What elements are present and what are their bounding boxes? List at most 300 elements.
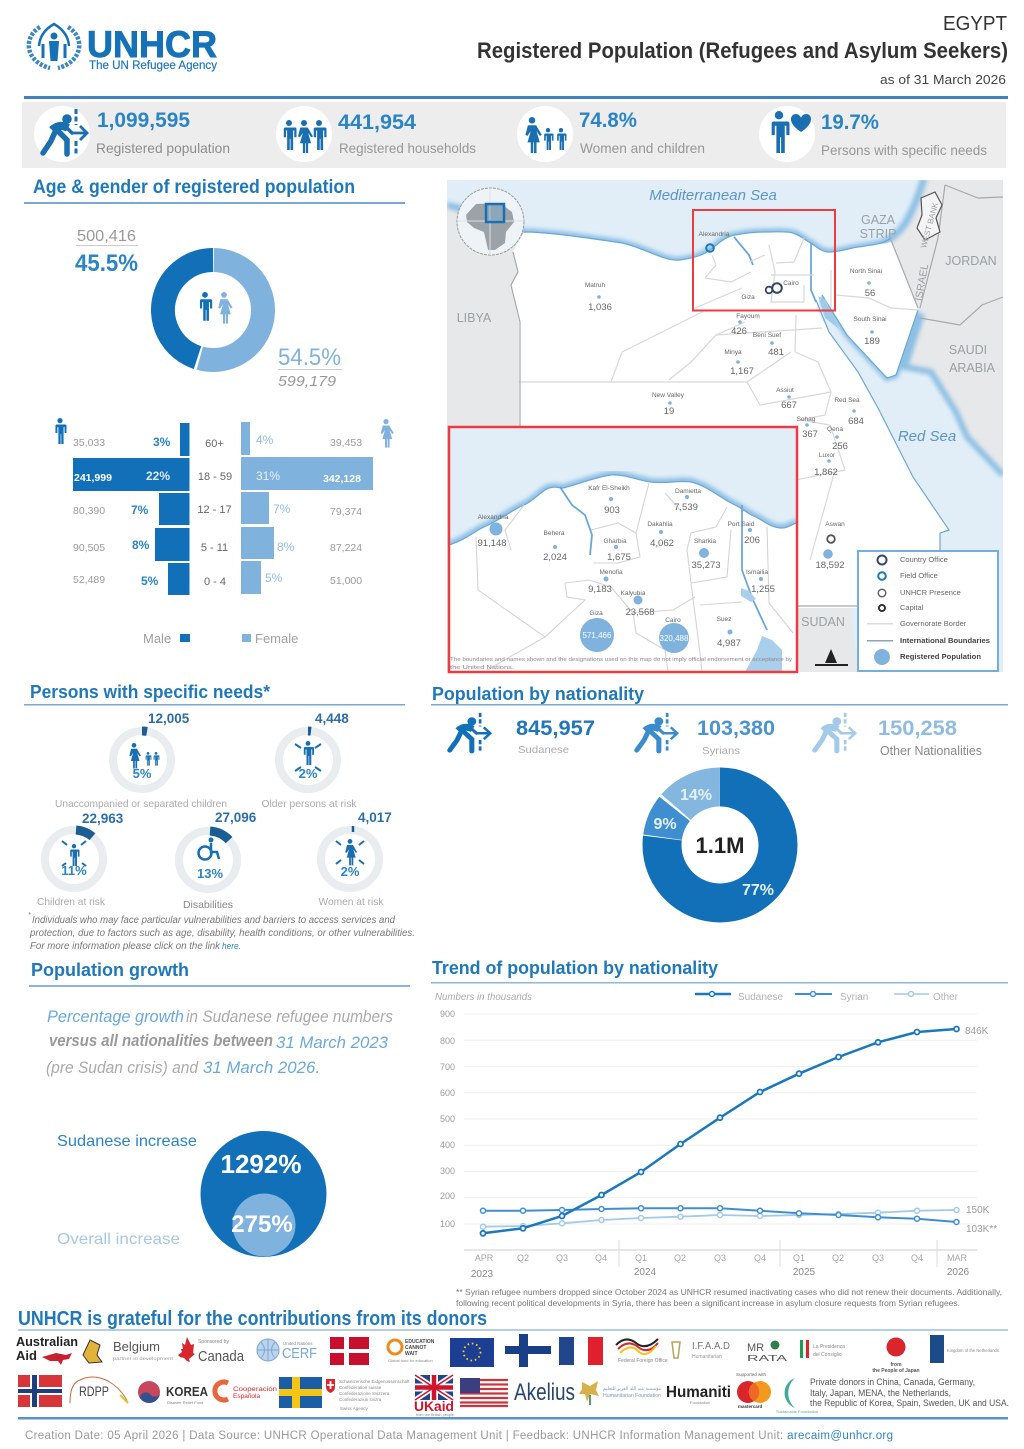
ring: older persons: 4,448 bbox=[315, 711, 349, 726]
donor: foundation text: Humanitarian Foundation bbox=[603, 1393, 661, 1399]
text: private donors: Italy, Japan, MENA, the Netherlands, bbox=[810, 1388, 951, 1398]
chart: population pyramid: 60+ bbox=[205, 438, 224, 450]
governorate labels: 18,592 bbox=[815, 560, 845, 571]
chart: population pyramid: 8% bbox=[132, 538, 150, 552]
donor: UK aid bbox=[414, 1375, 454, 1417]
donor: Netherlands bbox=[930, 1335, 1000, 1363]
line chart: trend: 300 bbox=[440, 1166, 455, 1176]
inset map: Nile Delta: The boundaries and names shown and the designations used on this map do not imply official endorsement or acceptance by bbox=[450, 657, 792, 663]
donor: IFAD bbox=[692, 1341, 730, 1360]
title: as of 31 March 2026 bbox=[880, 72, 1006, 87]
icon: refugee walking bbox=[43, 109, 87, 156]
governorate labels: Matruh bbox=[585, 282, 605, 289]
donor: Education Cannot Wait: WAIT bbox=[405, 1351, 418, 1357]
label: male share: 45.5% bbox=[75, 250, 138, 277]
donor: Mastercard Foundation: mastercard bbox=[738, 1404, 763, 1409]
donor: tree emblem bbox=[579, 1381, 599, 1405]
sea: Mediterranean bbox=[447, 178, 1003, 672]
chart: population pyramid: 8% bbox=[277, 540, 295, 554]
donor: Belgium bbox=[113, 1339, 174, 1361]
ring: unaccompanied children bbox=[55, 711, 227, 810]
inset map: Nile Delta: 1,675 bbox=[607, 552, 631, 563]
icon: Sudanese bbox=[450, 713, 490, 753]
series: Syrian bbox=[480, 1206, 959, 1224]
governorate labels: Giza bbox=[741, 294, 755, 301]
donor: Switzerland: Confederaziun svizra bbox=[339, 1397, 382, 1402]
inset map: Nile Delta: Sharkia bbox=[694, 538, 716, 545]
donor: crescent: Sustainable Foundation bbox=[776, 1409, 818, 1414]
footnote: specific needs: For more information please click on the link bbox=[30, 941, 221, 952]
line chart: trend: Q4 bbox=[595, 1253, 607, 1263]
chart: population pyramid: 90,505 bbox=[73, 542, 105, 554]
figure: Syrians bbox=[697, 717, 775, 757]
key figure: registered population: 1,099,595 bbox=[97, 109, 190, 132]
logo: UNHCR: UNHCR bbox=[87, 24, 217, 65]
ring: older persons: 2% bbox=[299, 766, 318, 781]
inset map: Nile Delta: Damietta bbox=[675, 488, 701, 495]
donor: Ireland harp bbox=[672, 1342, 680, 1358]
labels: countries and seas: JORDAN bbox=[945, 254, 997, 268]
inset map: Nile Delta: 4,987 bbox=[717, 638, 741, 649]
red extent box bbox=[693, 210, 835, 310]
inset map: Nile Delta: Cairo bbox=[665, 617, 681, 624]
donut chart: nationality bbox=[638, 763, 802, 927]
text: private donors: Private donors in China, Canada, Germany, bbox=[810, 1377, 975, 1387]
icon: Syrians bbox=[637, 713, 677, 753]
donor: IOM: RATA bbox=[747, 1354, 788, 1363]
donor: Education Cannot Wait: EDUCATION bbox=[405, 1339, 435, 1345]
chart: growth circles: Sudanese increase bbox=[57, 1133, 197, 1150]
bubbles bbox=[490, 495, 763, 653]
map legend: International Boundaries bbox=[900, 636, 990, 645]
donor: Australian Aid bbox=[16, 1334, 78, 1365]
figure: other bbox=[878, 717, 982, 758]
map legend: Field Office bbox=[900, 571, 938, 580]
chart legend bbox=[695, 992, 959, 1003]
inset map: Nile Delta: Ismailia bbox=[746, 569, 768, 576]
governorate labels: 189 bbox=[864, 336, 880, 347]
key figure: households bbox=[338, 111, 476, 156]
title: EGYPT bbox=[943, 13, 1007, 35]
donor: Switzerland: Confederazione Svizzera bbox=[339, 1391, 390, 1396]
labels: countries and seas: Mediterranean Sea bbox=[649, 187, 777, 204]
line chart: trend: 600 bbox=[440, 1088, 455, 1098]
flag: Sweden bbox=[279, 1377, 322, 1408]
key figure: registered population: Registered population bbox=[96, 140, 230, 156]
footnote: specific needs: here. bbox=[222, 941, 241, 951]
panel: key figures bbox=[22, 102, 1006, 168]
line chart: trend: 700 bbox=[440, 1062, 455, 1072]
chart: population pyramid: 5% bbox=[265, 571, 283, 585]
label: male share: 500,416 bbox=[77, 228, 136, 245]
footnote: Syrian numbers: following recent political developments in Syria, there has been a significant increase in asylum closure requests from Syrian refugees. bbox=[456, 1298, 960, 1308]
donor: Italy: del Consiglio bbox=[813, 1352, 842, 1358]
ring: older persons bbox=[262, 711, 357, 810]
icon: person with heart bbox=[771, 111, 811, 153]
key figure: registered population bbox=[96, 109, 230, 156]
donut chart: nationality: 1.1M bbox=[696, 833, 744, 858]
inset map: Nile Delta: 23,568 bbox=[625, 607, 655, 618]
line chart: trend: Q2 bbox=[674, 1253, 686, 1263]
donor: Korea: KOREA bbox=[166, 1384, 209, 1399]
labels: countries and seas: SUDAN bbox=[801, 615, 845, 629]
labels: countries and seas: ISRAEL bbox=[913, 263, 931, 302]
inset map: Nile Delta: 7,539 bbox=[674, 502, 698, 513]
end labels: 846K bbox=[965, 1026, 989, 1037]
ring: children at risk: 11% bbox=[61, 863, 87, 878]
end labels: 103K** bbox=[966, 1224, 997, 1235]
flag: European Union bbox=[450, 1338, 494, 1367]
donor: RDPP bbox=[70, 1377, 128, 1403]
text: private donors: the Republic of Korea, Spain, Sweden, UK and USA. bbox=[810, 1398, 1009, 1408]
line chart: trend: Q3 bbox=[556, 1253, 568, 1263]
line chart: trend: 900 bbox=[440, 1009, 455, 1019]
figure: Sudanese: Sudanese bbox=[518, 744, 569, 756]
ring: disabilities: 13% bbox=[197, 866, 223, 881]
donor: Switzerland: Swiss Agency bbox=[340, 1406, 369, 1411]
inset map: Nile Delta: Kalyubia bbox=[621, 590, 646, 597]
donor: Italy bbox=[800, 1340, 845, 1358]
donor: Humaniti: Humaniti bbox=[666, 1384, 731, 1401]
donor: RDPP: RDPP bbox=[79, 1383, 109, 1399]
chart: population pyramid: 5% bbox=[141, 574, 159, 588]
donor: Spanish cooperation: Cooperación bbox=[233, 1386, 277, 1393]
donor: Education Cannot Wait: Global fund for education bbox=[388, 1358, 433, 1363]
donor: IOM bbox=[747, 1340, 788, 1363]
labels: countries and seas bbox=[457, 187, 997, 629]
key figure: specific needs: Persons with specific needs bbox=[821, 142, 987, 158]
donor: UK aid: from the British people bbox=[416, 1413, 454, 1417]
panel: specific needs rings bbox=[37, 711, 392, 911]
ring: disabilities: Disabilities bbox=[183, 899, 233, 911]
icon: female bbox=[381, 419, 394, 448]
heading: population growth: Population growth bbox=[31, 959, 189, 980]
donut chart: nationality: 14% bbox=[680, 787, 712, 804]
offices on main map bbox=[706, 244, 835, 543]
text: growth description: versus all nationalities between bbox=[49, 1032, 273, 1050]
chart: growth circles: Overall increase bbox=[57, 1231, 180, 1248]
chart: population pyramid: 87,224 bbox=[330, 542, 362, 554]
key figure: specific needs bbox=[821, 111, 987, 158]
end labels: 150K bbox=[966, 1205, 990, 1216]
donut chart: nationality: 77% bbox=[742, 882, 774, 899]
key figure: specific needs: 19.7% bbox=[821, 111, 879, 134]
end labels bbox=[965, 1026, 997, 1235]
logo: UNHCR: The UN Refugee Agency bbox=[89, 60, 217, 72]
donor: Australian Aid: Aid bbox=[16, 1348, 37, 1363]
inset map: Nile Delta: 320,488 bbox=[660, 634, 689, 643]
series: Sudanese bbox=[480, 1026, 959, 1236]
chart: population pyramid: 18 - 59 bbox=[198, 471, 232, 483]
donor: CERF: United Nations bbox=[283, 1341, 313, 1346]
donor: Spanish cooperation: Española bbox=[233, 1393, 260, 1400]
donor: Bahrain style emblem bbox=[83, 1340, 102, 1363]
donor: UK aid: UKaid bbox=[414, 1398, 454, 1414]
line chart: trend: 2024 bbox=[634, 1267, 657, 1278]
labels: countries and seas: Red Sea bbox=[898, 428, 956, 445]
inset map: Nile Delta: 9,183 bbox=[588, 584, 612, 595]
inset map: Nile Delta: 903 bbox=[604, 505, 620, 516]
panel: nationality figures bbox=[450, 713, 982, 758]
donor: Germany bbox=[616, 1339, 668, 1364]
chart: population pyramid bbox=[55, 418, 394, 646]
map legend bbox=[858, 551, 998, 671]
figure: other: Other Nationalities bbox=[880, 744, 982, 758]
chart: growth circles: 1292% bbox=[221, 1149, 301, 1179]
line chart: trend: Q4 bbox=[911, 1253, 923, 1263]
label: female share bbox=[278, 344, 342, 390]
figure: Syrians: 103,380 bbox=[697, 717, 775, 740]
inset map: Nile Delta: 35,273 bbox=[691, 560, 721, 571]
inset map: Nile Delta: Giza bbox=[589, 610, 603, 617]
donor: crescent bbox=[776, 1378, 818, 1414]
key figure: households: 441,954 bbox=[338, 111, 416, 134]
heading: nationality: Population by nationality bbox=[432, 683, 645, 704]
chart: population pyramid: 35,033 bbox=[73, 437, 105, 449]
governorate labels: 256 bbox=[832, 441, 848, 452]
inset map: Nile Delta: 206 bbox=[744, 535, 760, 546]
chart: population pyramid: 3% bbox=[153, 435, 171, 449]
inset map: Nile Delta: Gharbia bbox=[603, 538, 627, 545]
icon: couple bbox=[199, 292, 233, 324]
inset globe bbox=[457, 188, 524, 255]
line chart: trend: Q2 bbox=[832, 1253, 844, 1263]
map legend: Country Office bbox=[900, 555, 948, 564]
heading: specific needs: Persons with specific needs* bbox=[30, 681, 271, 702]
text: growth description bbox=[46, 1008, 393, 1077]
labels: countries and seas: WEST BANK bbox=[919, 201, 940, 249]
line chart: trend: MAR bbox=[947, 1253, 968, 1263]
donor: Belgium: Belgium bbox=[113, 1339, 160, 1354]
line chart: trend: 2026 bbox=[947, 1267, 970, 1278]
governorate labels: 481 bbox=[768, 347, 784, 358]
label: female share: 54.5% bbox=[278, 344, 341, 371]
chart: population pyramid: 51,000 bbox=[330, 575, 362, 587]
donor: Akelius: Akelius bbox=[514, 1379, 575, 1406]
chart legend: Other bbox=[933, 992, 959, 1003]
donor: IOM: MR bbox=[747, 1342, 764, 1354]
flag: Finland bbox=[505, 1334, 551, 1367]
donor: Canada: Canada bbox=[198, 1348, 245, 1365]
line chart: trend: Q4 bbox=[754, 1253, 766, 1263]
north arrow bbox=[815, 649, 848, 666]
ring: children at risk bbox=[37, 811, 124, 908]
line chart: trend: Q1 bbox=[635, 1253, 647, 1263]
ring: disabilities: 27,096 bbox=[215, 810, 257, 825]
line chart: trend: 400 bbox=[440, 1140, 455, 1150]
governorate labels: Sohag bbox=[797, 416, 816, 423]
labels: countries and seas: GAZA bbox=[861, 213, 896, 227]
governorate labels: Cairo bbox=[783, 280, 799, 287]
map: Egypt bbox=[447, 178, 1003, 672]
text: private donors bbox=[810, 1377, 1009, 1408]
land: governorate and international borders bbox=[519, 238, 918, 560]
footer: Creation Date: 05 April 2026 | Data Source: UNHCR Operational Data Management Unit | Feedback: UNHCR Information Management Unit: arecaim@unhcr.org bbox=[25, 1430, 893, 1442]
labels: countries and seas: STRIP bbox=[860, 227, 896, 241]
flag: Denmark bbox=[330, 1337, 369, 1365]
inset map: Nile Delta: Port Said bbox=[728, 521, 755, 528]
governorate labels: 1,167 bbox=[730, 366, 754, 377]
ring: unaccompanied children: 5% bbox=[133, 766, 152, 781]
line chart: trend: 2025 bbox=[793, 1267, 816, 1278]
governorate labels: Minya bbox=[724, 349, 742, 356]
figure: other: 150,258 bbox=[878, 717, 957, 740]
governorate labels: Luxor bbox=[819, 452, 836, 459]
chart: population pyramid: 241,999 bbox=[74, 472, 112, 484]
governorate labels: 1,036 bbox=[588, 302, 612, 313]
line chart: trend: Numbers in thousands bbox=[435, 992, 532, 1003]
text: growth description: 31 March 2026. bbox=[203, 1059, 320, 1077]
donor: Spanish cooperation bbox=[215, 1382, 277, 1400]
line chart: trend: Q3 bbox=[714, 1253, 726, 1263]
icon: male bbox=[55, 418, 66, 444]
governorate labels: North Sinai bbox=[850, 268, 882, 275]
labels: countries and seas: ARABIA bbox=[949, 361, 996, 375]
donor: CERF: CERF bbox=[282, 1345, 317, 1362]
governorate labels: 367 bbox=[802, 429, 818, 440]
donor: IFAD: I.F.A.A.D bbox=[692, 1341, 730, 1352]
governorate labels: Alexandria bbox=[699, 231, 730, 238]
key figure: households: Registered households bbox=[339, 140, 476, 156]
legend: gender: Male bbox=[143, 631, 171, 646]
chart legend: Sudanese bbox=[738, 992, 783, 1003]
governorate labels: South Sinai bbox=[853, 316, 887, 323]
flag: France bbox=[559, 1337, 603, 1365]
inset map: Nile Delta: 1,255 bbox=[751, 584, 775, 595]
donor: Humaniti: Foundation bbox=[690, 1400, 710, 1405]
donor: Mastercard Foundation: Supported with bbox=[736, 1372, 767, 1377]
logo: UNHCR bbox=[29, 24, 217, 72]
chart: population pyramid: 22% bbox=[146, 469, 170, 483]
ring: women at risk: Women at risk bbox=[318, 896, 384, 908]
text: growth description: 31 March 2023 bbox=[276, 1034, 389, 1052]
chart: growth circles: 275% bbox=[231, 1211, 293, 1238]
line chart: trend: Q1 bbox=[793, 1253, 805, 1263]
chart: population pyramid: 39,453 bbox=[330, 437, 362, 449]
title bbox=[477, 13, 1008, 87]
footnote: specific needs: protection, due to factors such as age, disability, health conditions, or other vulnerabilities. bbox=[29, 928, 415, 939]
donut chart: nationality: 9% bbox=[653, 816, 677, 833]
labels: countries and seas: LIBYA bbox=[457, 311, 492, 325]
donor: Canada bbox=[178, 1337, 245, 1365]
governorate labels: 426 bbox=[731, 326, 747, 337]
line chart: trend: Q2 bbox=[517, 1253, 529, 1263]
line chart: trend: 2023 bbox=[471, 1269, 494, 1280]
chart: population pyramid: 0 - 4 bbox=[204, 576, 226, 588]
text: growth description: (pre Sudan crisis) and bbox=[46, 1059, 199, 1077]
line chart: trend: 500 bbox=[440, 1114, 455, 1124]
donor: Netherlands: Kingdom of the Netherlands bbox=[947, 1348, 1000, 1353]
donor: Switzerland: Schweizerische Eidgenossenschaft bbox=[339, 1379, 410, 1384]
sea: Red Sea bbox=[816, 295, 1003, 672]
chart: population pyramid: 342,128 bbox=[323, 473, 361, 485]
ring: women at risk: 4,017 bbox=[358, 810, 392, 825]
text: growth description: Percentage growth bbox=[47, 1008, 184, 1026]
governorate labels: New Valley bbox=[652, 392, 685, 399]
figure: Syrians: Syrians bbox=[702, 745, 740, 757]
chart: population pyramid: 7% bbox=[131, 503, 149, 517]
line chart: trend: APR bbox=[475, 1253, 494, 1263]
governorate labels: Assiut bbox=[776, 387, 794, 394]
donor: Canada: Sponsored by bbox=[198, 1339, 229, 1345]
line chart: trend: Q3 bbox=[872, 1253, 884, 1263]
heading: trend: Trend of population by nationality bbox=[432, 957, 719, 978]
series: other bbox=[480, 1208, 959, 1229]
inset map: Nile Delta: Behera bbox=[544, 530, 565, 537]
inset map: Nile Delta: the United Nations. bbox=[450, 665, 515, 671]
chart: population pyramid: 7% bbox=[273, 502, 291, 516]
donor: CERF bbox=[257, 1339, 317, 1362]
figure: Sudanese bbox=[516, 717, 595, 756]
heading: age and gender: Age & gender of registered population bbox=[33, 176, 355, 198]
line chart: trend: 200 bbox=[440, 1191, 455, 1201]
donor: Japan bbox=[872, 1338, 920, 1374]
donor: Education Cannot Wait bbox=[388, 1339, 435, 1363]
map legend: UNHCR Presence bbox=[900, 588, 961, 597]
map legend: Registered Population bbox=[900, 652, 981, 661]
chart: population pyramid: 31% bbox=[256, 469, 280, 483]
text: growth description: in Sudanese refugee numbers bbox=[186, 1008, 393, 1026]
icon: women and children bbox=[525, 117, 566, 153]
donor: Australian Aid: Australian bbox=[16, 1334, 78, 1349]
governorate labels: 1,862 bbox=[814, 467, 838, 478]
donor: Switzerland bbox=[326, 1379, 410, 1411]
inset map: Nile Delta: Alexandria bbox=[478, 514, 509, 521]
donor: foundation text: مؤسسة عبد الله الغرير للتعليم bbox=[603, 1386, 661, 1392]
donor: IFAD: Humanitarian bbox=[692, 1354, 722, 1360]
donor: Korea: Disaster Relief Fund bbox=[167, 1400, 203, 1405]
ring: disabilities bbox=[179, 810, 257, 911]
donor: Korea bbox=[138, 1381, 209, 1405]
inset map: Nile Delta: 2,024 bbox=[543, 552, 567, 563]
key figure: women and children bbox=[579, 109, 705, 156]
chart: population pyramid: 5 - 11 bbox=[201, 542, 228, 554]
chart: population pyramid: 52,489 bbox=[73, 574, 105, 586]
flag: Norway bbox=[18, 1375, 62, 1407]
ring: women at risk: 2% bbox=[341, 864, 360, 879]
ring: children at risk: 22,963 bbox=[82, 811, 124, 826]
chart: population pyramid: 80,390 bbox=[73, 505, 105, 517]
chart: population pyramid: 79,374 bbox=[330, 506, 362, 518]
map legend: Governorate Border bbox=[900, 619, 967, 628]
ring: older persons: Older persons at risk bbox=[262, 798, 357, 810]
heading: donors: UNHCR is grateful for the contributions from its donors bbox=[18, 1308, 487, 1330]
inset map: Nile Delta: Kafr El-Sheikh bbox=[588, 485, 630, 492]
donut chart: gender bbox=[75, 228, 342, 390]
footnote: specific needs: Individuals who may face particular vulnerabilities and barriers to access services and bbox=[32, 915, 395, 926]
labels: countries and seas: SAUDI bbox=[949, 343, 987, 357]
inset map: Nile Delta: 4,062 bbox=[650, 538, 674, 549]
ring: unaccompanied children: Unaccompanied or separated children bbox=[55, 798, 227, 810]
land: Egypt bbox=[511, 232, 960, 608]
donor: Switzerland: Confédération suisse bbox=[339, 1385, 382, 1390]
donor: Italy: La Presidenza bbox=[813, 1344, 845, 1350]
donor: foundation text bbox=[603, 1386, 661, 1399]
governorate labels bbox=[585, 231, 887, 571]
donor: Germany: Federal Foreign Office bbox=[618, 1358, 668, 1364]
chart: population pyramid: 4% bbox=[256, 433, 274, 447]
footnote: Syrian numbers bbox=[456, 1287, 1002, 1308]
legend: gender: Female bbox=[255, 631, 298, 646]
donor: Japan: from bbox=[890, 1362, 902, 1368]
ring: women at risk bbox=[318, 810, 392, 908]
label: male share bbox=[75, 228, 138, 277]
flag: USA bbox=[460, 1378, 508, 1407]
inset map: Nile Delta: 571,466 bbox=[583, 631, 612, 640]
donor logos bbox=[16, 1334, 1009, 1417]
governorate labels: 667 bbox=[781, 400, 797, 411]
inset map: Nile Delta: Dakahlia bbox=[647, 521, 673, 528]
